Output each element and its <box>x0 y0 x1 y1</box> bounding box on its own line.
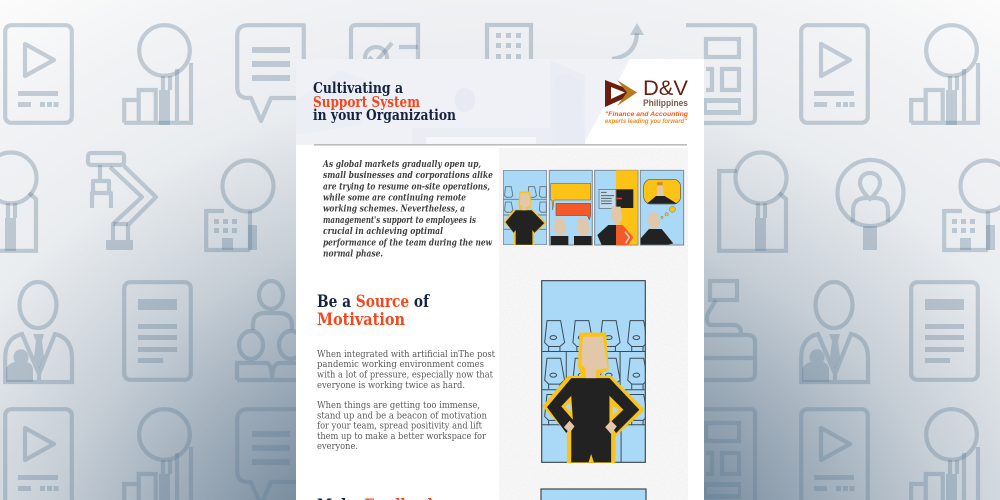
header band <box>296 59 688 145</box>
section body text: When integrated with artificial inThe post <box>317 349 495 360</box>
icon: robot arm <box>88 153 156 250</box>
section body text: them up to make a better workspace for <box>317 431 486 442</box>
comic panel 3: presenter <box>595 170 638 245</box>
icon: video document, row 4 right <box>801 409 868 500</box>
section body text: everyone. <box>317 441 358 452</box>
comic panel 4: thought bubble <box>640 170 684 245</box>
icon: speech bubble, row 4 <box>237 409 304 500</box>
section body text: for your team, spread positivity and lift <box>317 420 482 432</box>
leader figure <box>542 333 645 463</box>
icon: building <box>487 25 531 60</box>
intro paragraph: are trying to resume on-site operations, <box>323 182 490 192</box>
large illustration: leader in front of team <box>541 280 646 463</box>
intro paragraph: small businesses and corporations alike <box>323 170 493 181</box>
icon: magnifier building, row 2 right <box>944 160 1000 250</box>
section body text: stand up and be a beacon of motivation <box>317 410 487 422</box>
icon: magnifier chart, row 4 right <box>911 409 978 500</box>
section heading: Be a Source of Motivation: Be a Source of <box>317 292 430 311</box>
intro paragraph: As global markets gradually open up, <box>322 159 481 170</box>
icon: magnifier chart, row 1 <box>124 25 191 125</box>
next illustration, cropped <box>541 489 646 500</box>
icon: magnifier document, row 2 left <box>0 152 37 251</box>
icon: layout card, row 1 <box>686 25 755 123</box>
icon: suit person, row 3 <box>5 282 72 382</box>
title: Cultivating a <box>313 80 404 97</box>
section body text: pandemic working environment comes <box>317 359 484 370</box>
background team masks <box>545 321 648 425</box>
section body text: When things are getting too immense, <box>317 400 480 411</box>
intro paragraph: while some are continuing remote <box>323 192 466 204</box>
icon: growth arrow <box>612 23 644 59</box>
textured image column <box>499 148 688 500</box>
logo <box>605 77 688 125</box>
article page <box>296 59 704 500</box>
intro paragraph: working schemes. Nevertheless, a <box>323 204 465 214</box>
intro paragraph: management's support to employees is <box>323 215 476 226</box>
intro paragraph: normal phase. <box>323 248 383 260</box>
icon: magnifier document, row 2 right <box>719 152 786 251</box>
logo: experts leading you forward" <box>605 118 688 125</box>
section heading: Be a Source of Motivation: Motivation <box>317 310 405 329</box>
icon: cashier <box>697 281 755 380</box>
icon: text document, row 3 <box>124 282 191 380</box>
icon: magnifier chart, row 4 <box>124 409 191 500</box>
icon: checklist card <box>351 25 418 69</box>
header divider <box>314 144 687 146</box>
icon: suit person, row 3 right <box>801 282 868 382</box>
section body text: everyone is working twice as hard. <box>317 380 465 391</box>
intro paragraph: crucial in achieving optimal <box>323 226 443 237</box>
section heading: Be a Source of Motivation <box>317 292 430 329</box>
icon: people at a desk <box>237 281 303 380</box>
logo: D&V <box>643 77 688 100</box>
icon: magnifier building, row 2 <box>206 160 274 250</box>
icon: layout card, row 4 <box>686 409 755 500</box>
title: Support System <box>313 94 421 111</box>
logo: Philippines <box>643 98 688 109</box>
title <box>313 80 456 124</box>
comic panel 1: leader <box>503 170 547 245</box>
icon: magnifier chart, row 1 right <box>911 25 978 125</box>
section body text: with a lot of pressure, especially now that <box>317 370 493 380</box>
icon: video document, row 1 right <box>801 25 868 123</box>
intro paragraph: performance of the team during the new <box>323 238 493 248</box>
icon: person in magnifier <box>838 160 904 250</box>
icon: video document, row 1 <box>5 25 72 123</box>
icon: text document, row 3 right <box>911 282 978 380</box>
logo: "Finance and Accounting <box>605 111 688 118</box>
intro paragraph <box>322 159 493 260</box>
icon: video document, row 4 <box>5 409 72 500</box>
comic panel 2: speech bubbles <box>549 170 592 245</box>
section body text <box>317 349 495 452</box>
icon: speech bubble, row 1 <box>237 25 304 121</box>
title: in your Organization <box>313 107 456 124</box>
comic strip <box>503 170 684 245</box>
